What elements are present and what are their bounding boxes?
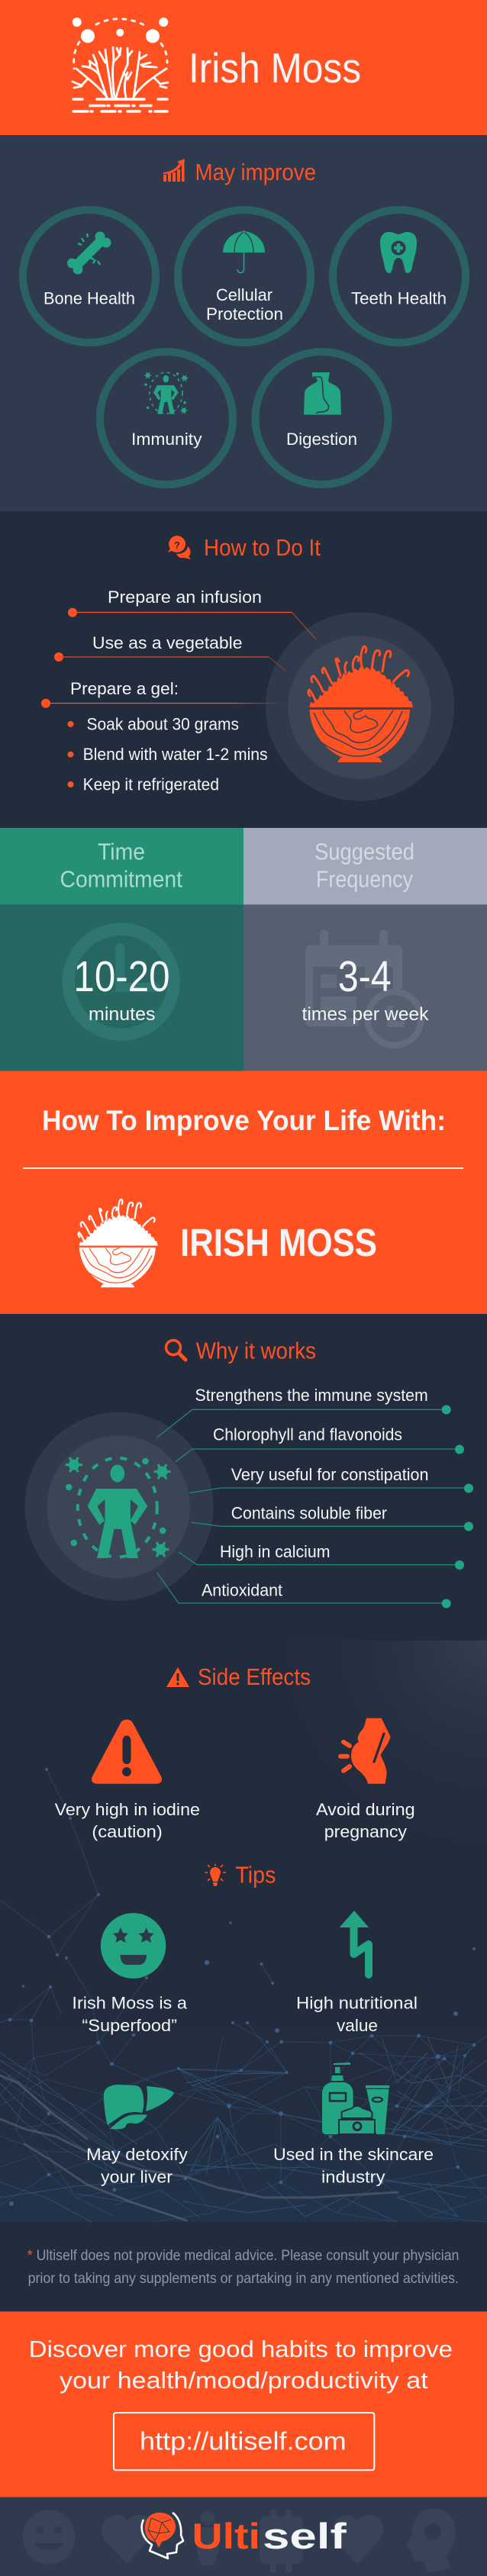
header banner	[0, 0, 487, 135]
heading: why it works: Why it works	[196, 1338, 316, 1364]
step: gel	[41, 679, 282, 794]
faint footer icons	[23, 2509, 456, 2573]
panel: time commitment: minutes	[89, 1004, 156, 1025]
side effect: iodine	[55, 1720, 200, 1841]
icon: calendar	[305, 929, 421, 1045]
tip: nutritional value: High nutritional	[296, 1994, 418, 2013]
call to action	[0, 2311, 487, 2497]
panel: suggested frequency	[244, 828, 487, 1071]
footer	[0, 2497, 487, 2576]
benefit: digestion	[255, 352, 388, 485]
side effect: iodine: Very high in iodine	[55, 1800, 200, 1819]
tip: skincare	[273, 2062, 434, 2187]
panel: time commitment	[0, 828, 244, 1071]
benefit: teeth health	[333, 210, 466, 343]
tip: skincare: Used in the skincare	[273, 2145, 434, 2164]
tip: superfood: Irish Moss is a	[72, 1994, 188, 2013]
reason: immune system	[157, 1386, 451, 1438]
side effect: iodine: (caution)	[92, 1822, 163, 1841]
step: vegetable: Use as a vegetable	[92, 633, 243, 652]
panel: time commitment: Commitment	[60, 866, 182, 893]
panel: dark background	[0, 1314, 487, 2312]
benefit: cellular protection	[178, 210, 311, 343]
icon: irish moss coral	[73, 18, 168, 111]
benefit: digestion: Digestion	[286, 430, 357, 449]
disclaimer: prior to taking any supplements or partaking in any mentioned activities.	[28, 2270, 459, 2287]
reason: chlorophyll	[176, 1425, 464, 1462]
reason: soluble fiber	[191, 1504, 473, 1531]
ultiself logo	[142, 2513, 347, 2558]
reason: calcium	[179, 1542, 464, 1570]
step: gel: Blend with water 1-2 mins	[83, 745, 268, 764]
disclaimer	[27, 2247, 459, 2287]
network texture	[0, 1768, 487, 2222]
side effect: pregnancy	[316, 1718, 415, 1841]
step: gel: Keep it refrigerated	[83, 775, 219, 794]
benefit: bone health: Bone Health	[44, 289, 135, 308]
panel: why it works	[24, 1338, 473, 1608]
heading: tips: Tips	[235, 1862, 276, 1889]
reason: constipation	[189, 1465, 473, 1493]
panel: may improve	[0, 135, 487, 511]
tip: detoxify liver	[86, 2085, 189, 2187]
reason: antioxidant	[157, 1573, 451, 1608]
call to action: your health/mood/productivity at	[60, 2367, 428, 2394]
title: Irish Moss	[189, 44, 361, 92]
figure: immune person badge	[24, 1412, 214, 1601]
side effect: pregnancy: pregnancy	[324, 1822, 408, 1841]
benefit: teeth health: Teeth Health	[351, 289, 447, 308]
reason: constipation: Very useful for constipation	[231, 1465, 429, 1484]
panel: time commitment: 10-20	[73, 952, 170, 1001]
icon: white bowl	[79, 1199, 158, 1287]
panel: how to improve banner: How To Improve Your Life With:	[42, 1105, 446, 1136]
heading: how to do it: ?	[174, 539, 180, 551]
step: gel: Prepare a gel:	[70, 679, 179, 698]
panel: time commitment: Time	[98, 839, 145, 865]
benefit: bone health	[23, 210, 156, 343]
tip: superfood	[72, 1913, 188, 2035]
benefit: cellular protection: Protection	[206, 304, 283, 324]
panel: how to improve banner	[0, 1071, 487, 1314]
step: gel: Soak about 30 grams	[87, 715, 239, 734]
ultiself logo: self	[263, 2516, 347, 2556]
panel: suggested frequency: Suggested	[314, 839, 414, 865]
tip: nutritional value	[296, 1911, 418, 2035]
panel: suggested frequency: times per week	[302, 1004, 430, 1025]
heading: may improve: May improve	[195, 159, 316, 185]
panel: how to do it	[0, 511, 487, 828]
tip: detoxify liver: your liver	[101, 2168, 173, 2187]
reason: soluble fiber: Contains soluble fiber	[231, 1504, 387, 1523]
panel: side effects	[55, 1663, 415, 1841]
reason: calcium: High in calcium	[220, 1542, 330, 1561]
reason: antioxidant: Antioxidant	[202, 1581, 283, 1600]
step: infusion	[68, 588, 316, 639]
step: vegetable	[54, 633, 285, 671]
panel: how to improve banner: IRISH MOSS	[180, 1221, 377, 1264]
benefit: immunity	[100, 352, 233, 485]
icon: clock	[69, 929, 174, 1035]
reason: immune system: Strengthens the immune system	[195, 1386, 428, 1405]
tip: nutritional value: value	[337, 2016, 378, 2035]
call to action: Discover more good habits to improve	[29, 2336, 453, 2362]
panel: suggested frequency: Frequency	[316, 866, 413, 893]
url button	[114, 2413, 374, 2470]
tip: superfood: “Superfood”	[82, 2016, 177, 2035]
tip: skincare: industry	[321, 2168, 385, 2187]
heading: side effects: Side Effects	[198, 1663, 311, 1690]
benefit: immunity: Immunity	[131, 430, 202, 449]
benefit: cellular protection: Cellular	[216, 285, 273, 304]
step: infusion: Prepare an infusion	[108, 588, 262, 607]
reason: chlorophyll: Chlorophyll and flavonoids	[213, 1425, 402, 1444]
ultiself logo: Ulti	[192, 2516, 260, 2556]
url button: http://ultiself.com	[140, 2427, 347, 2455]
tip: detoxify liver: May detoxify	[86, 2145, 189, 2164]
panel: suggested frequency: 3-4	[338, 952, 392, 1001]
heading: how to do it: How to Do It	[204, 534, 321, 561]
panel: tips	[72, 1862, 434, 2187]
side effect: pregnancy: Avoid during	[316, 1800, 415, 1819]
heading: tips	[205, 1862, 276, 1889]
bowl badge	[266, 612, 454, 801]
